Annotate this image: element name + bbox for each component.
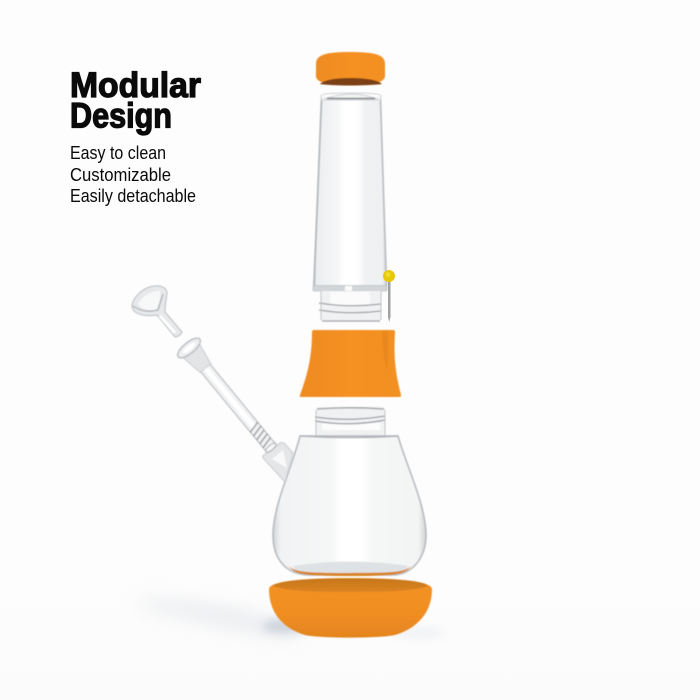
feature list: Easy to clean bbox=[70, 143, 166, 163]
feature list bbox=[70, 143, 196, 206]
glass flask bbox=[273, 436, 426, 576]
title: Modular bbox=[70, 66, 201, 105]
title: Design bbox=[70, 96, 172, 136]
feature list: Customizable bbox=[70, 165, 171, 185]
downstem joint bbox=[263, 443, 293, 482]
yellow pin bbox=[383, 270, 395, 322]
upper threaded neck bbox=[319, 291, 381, 322]
downstem tube bbox=[175, 335, 283, 459]
glass tube bbox=[313, 93, 387, 291]
floor shadow bbox=[140, 600, 446, 637]
feature list: Easily detachable bbox=[70, 186, 196, 206]
title bbox=[70, 66, 201, 136]
orange sleeve bbox=[300, 330, 401, 397]
lower threaded neck bbox=[315, 407, 385, 437]
orange base bowl bbox=[269, 578, 432, 638]
glass bowl piece bbox=[132, 286, 182, 337]
orange cap bbox=[316, 52, 385, 86]
